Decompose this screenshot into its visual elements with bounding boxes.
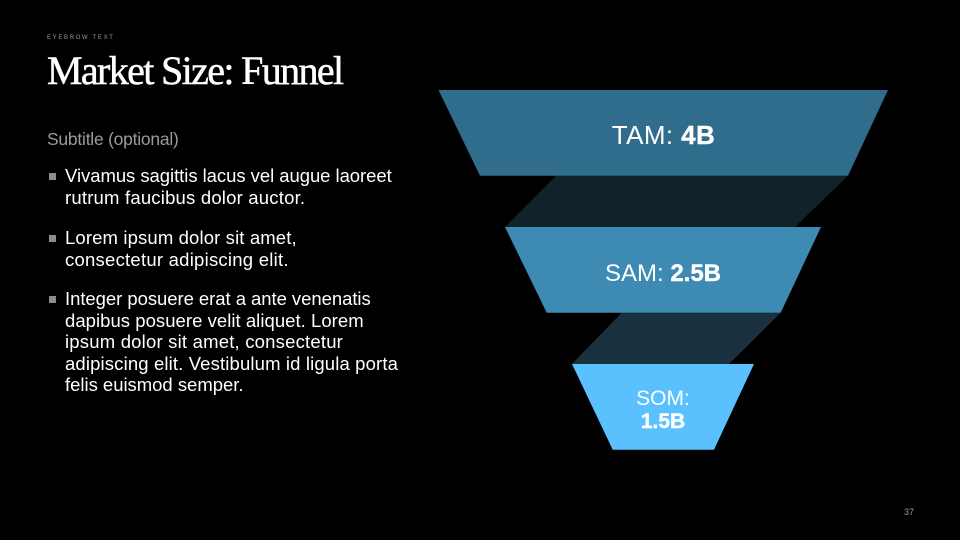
funnel tier: SAM: SAM: 2.5B bbox=[605, 260, 721, 287]
bullet 3: Integer posuere erat a ante venenatis bbox=[65, 288, 371, 309]
page number: 37 bbox=[904, 507, 914, 517]
funnel tier: SAM bbox=[505, 227, 821, 313]
bullet 1: Vivamus sagittis lacus vel augue laoreet bbox=[65, 165, 392, 186]
bullet 2 bbox=[49, 227, 297, 270]
bullet 3: dapibus posuere velit aliquet. Lorem bbox=[65, 310, 364, 330]
funnel tier: TAM: TAM: 4B bbox=[612, 120, 715, 150]
title: Market Size: Funnel bbox=[47, 48, 342, 93]
connector: TAM to SAM bbox=[505, 176, 848, 227]
bullet 1 bbox=[49, 165, 392, 208]
bullet 3: felis euismod semper. bbox=[65, 374, 244, 395]
bullet 3: adipiscing elit. Vestibulum id ligula porta bbox=[65, 352, 398, 374]
bullet list bbox=[49, 165, 398, 395]
subtitle: Subtitle (optional) bbox=[47, 129, 179, 149]
funnel tier: SOM: 1.5B bbox=[641, 410, 685, 433]
bullet 3 bbox=[49, 288, 398, 395]
connector: SAM to SOM bbox=[572, 313, 781, 364]
funnel tier: SOM bbox=[572, 364, 754, 450]
bullet 1: rutrum faucibus dolor auctor. bbox=[65, 186, 305, 208]
funnel tier: SOM: SOM: bbox=[636, 387, 690, 410]
bullet 2: consectetur adipiscing elit. bbox=[65, 248, 289, 270]
bullet 3: ipsum dolor sit amet, consectetur bbox=[65, 331, 343, 352]
bullet 2: Lorem ipsum dolor sit amet, bbox=[65, 227, 297, 248]
funnel tier: TAM bbox=[438, 90, 888, 176]
eyebrow text: EYEBROW TEXT bbox=[47, 35, 115, 41]
